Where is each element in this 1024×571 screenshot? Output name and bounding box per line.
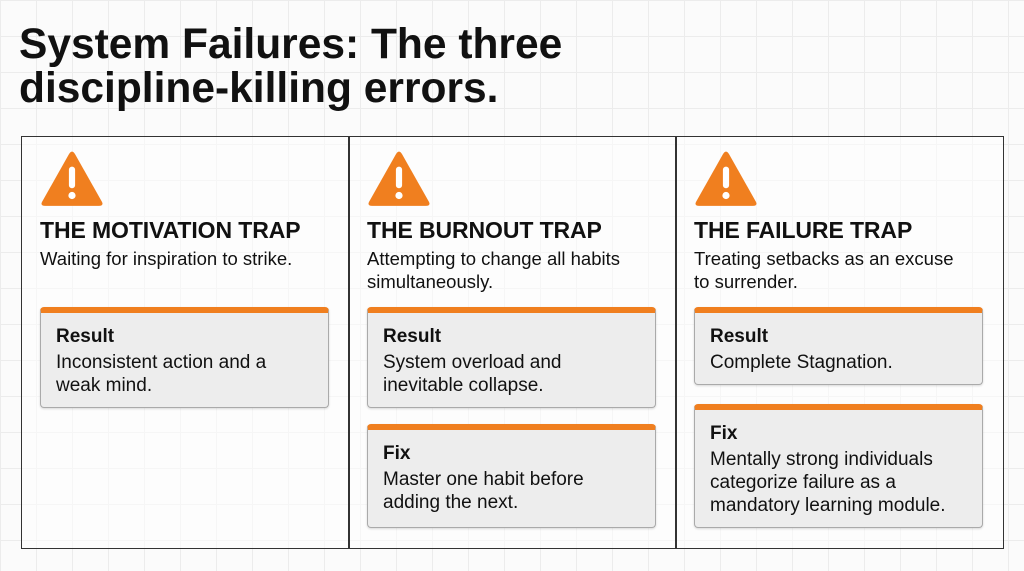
fix box: Master one habit before xyxy=(383,469,584,490)
subtitle: Waiting for inspiration to strike. xyxy=(40,248,292,269)
result box xyxy=(367,307,656,408)
subtitle xyxy=(367,248,620,292)
panel: motivation trap xyxy=(39,152,330,410)
heading: THE FAILURE TRAP xyxy=(694,217,912,243)
result box: inevitable collapse. xyxy=(383,375,544,396)
heading: THE MOTIVATION TRAP xyxy=(40,217,300,243)
icon: warning xyxy=(696,152,756,206)
subtitle: simultaneously. xyxy=(367,271,493,292)
fix box: categorize failure as a xyxy=(710,472,896,493)
title xyxy=(19,21,562,112)
subtitle: Treating setbacks as an excuse xyxy=(694,248,953,269)
fix box: Fix xyxy=(383,443,410,464)
heading: THE BURNOUT TRAP xyxy=(367,217,602,243)
fix box: Mentally strong individuals xyxy=(710,449,933,470)
subtitle xyxy=(694,248,953,292)
subtitle: Attempting to change all habits xyxy=(367,248,620,269)
panel: burnout trap xyxy=(366,152,657,530)
result box: Result xyxy=(710,326,768,347)
title: System Failures: The three xyxy=(19,21,562,68)
fix box: mandatory learning module. xyxy=(710,495,946,516)
result box: Result xyxy=(383,326,441,347)
fix box xyxy=(694,404,983,528)
title: discipline-killing errors. xyxy=(19,65,498,112)
panel: failure trap xyxy=(693,152,984,530)
result box: weak mind. xyxy=(56,375,152,396)
subtitle: to surrender. xyxy=(694,271,798,292)
fix box xyxy=(367,424,656,528)
result box xyxy=(694,307,983,385)
fix box: Fix xyxy=(710,423,737,444)
result box xyxy=(40,307,329,408)
result box: System overload and xyxy=(383,352,562,373)
icon: warning xyxy=(368,152,430,206)
frame xyxy=(21,136,1004,549)
icon: warning xyxy=(42,152,102,206)
result box: Inconsistent action and a xyxy=(56,352,266,373)
result box: Complete Stagnation. xyxy=(710,352,893,373)
result box: Result xyxy=(56,326,114,347)
fix box: adding the next. xyxy=(383,492,518,513)
